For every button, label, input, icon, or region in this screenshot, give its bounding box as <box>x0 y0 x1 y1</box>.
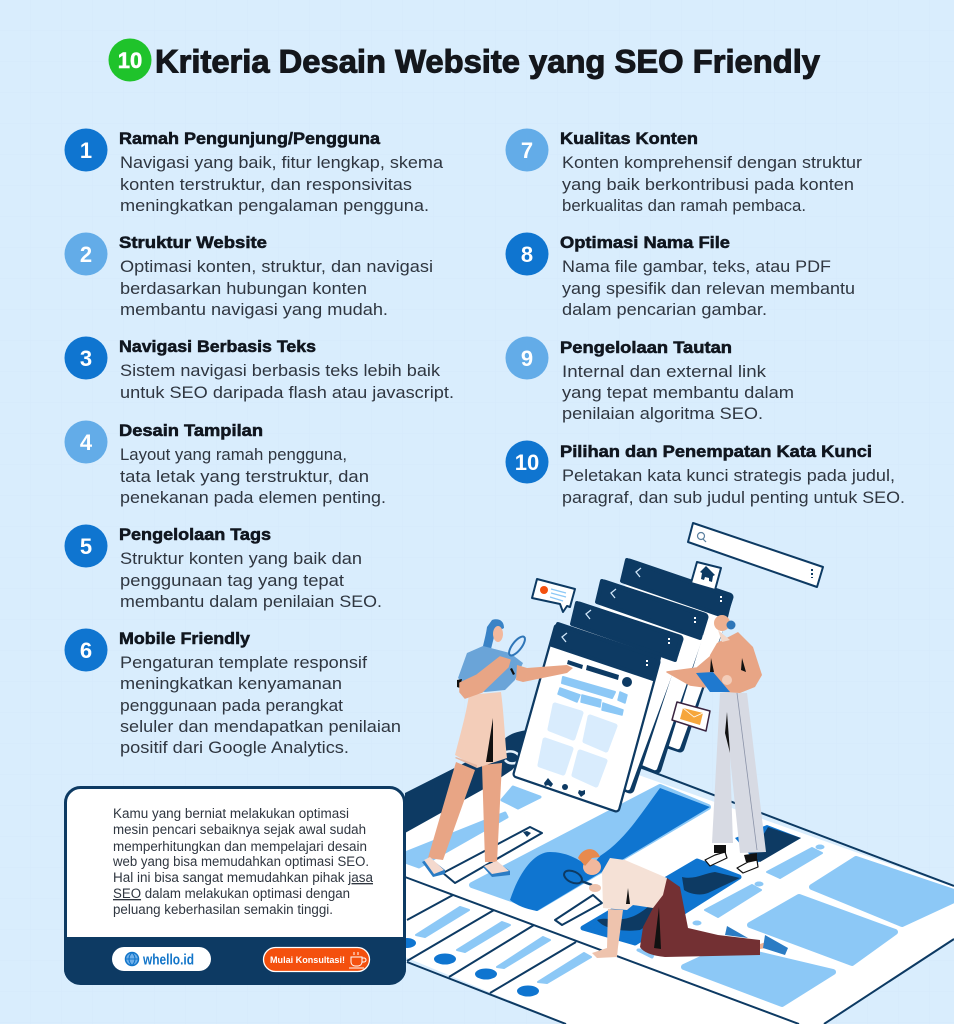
item 10 <box>506 440 905 507</box>
item 10: paragraf, dan sub judul penting untuk SEO. <box>562 488 905 507</box>
item 2: Struktur Website <box>119 233 267 252</box>
website pill: whello.id <box>142 952 194 968</box>
title: 10 <box>118 48 142 73</box>
illustration: back phone 3 <box>622 560 731 748</box>
item 2: membantu navigasi yang mudah. <box>120 300 388 319</box>
item 1 <box>64 128 444 215</box>
item 3: Navigasi Berbasis Teks <box>119 337 316 356</box>
item 4: 4 <box>80 430 93 455</box>
item 2: 2 <box>80 242 92 267</box>
item 10: 10 <box>515 450 539 475</box>
item 6: Pengaturan template responsif <box>120 653 367 672</box>
item 3: Sistem navigasi berbasis teks lebih baik <box>120 361 441 380</box>
item 8: dalam pencarian gambar. <box>562 300 767 319</box>
item 9 <box>506 336 794 423</box>
item 6: Mobile Friendly <box>119 629 251 648</box>
item 2: Optimasi konten, struktur, dan navigasi <box>120 257 433 276</box>
item 7 <box>506 128 862 215</box>
icon: search bar <box>688 523 823 587</box>
item 4: Desain Tampilan <box>119 421 263 440</box>
callout text: memperhitungkan dan mempelajari desain <box>113 839 367 854</box>
item 5: membantu dalam penilaian SEO. <box>120 592 382 611</box>
icon: chat bubble <box>532 579 575 612</box>
illustration: isometric website platform <box>398 730 954 1024</box>
item 7: Konten komprehensif dengan struktur <box>562 153 862 172</box>
item 3 <box>64 336 454 402</box>
item 6 <box>64 628 401 757</box>
item 8: yang spesifik dan relevan membantu <box>562 279 855 298</box>
item 9: penilaian algoritma SEO. <box>562 404 763 423</box>
callout text: mesin pencari sebaiknya sejak awal sudah <box>113 822 366 837</box>
item 1: 1 <box>80 138 92 163</box>
item 1: Ramah Pengunjung/Pengguna <box>119 129 381 148</box>
item 8: Nama file gambar, teks, atau PDF <box>562 257 831 276</box>
website pill <box>112 947 211 971</box>
callout text: web yang bisa memudahkan optimasi SEO. <box>112 854 369 869</box>
item 4: penekanan pada elemen penting. <box>120 488 386 507</box>
item 4 <box>64 420 386 507</box>
item 10: Peletakan kata kunci strategis pada judul, <box>562 466 895 485</box>
item 10: Pilihan dan Penempatan Kata Kunci <box>560 442 872 461</box>
illustration: back phone 2 <box>597 581 706 769</box>
item 6: seluler dan mendapatkan penilaian <box>120 717 401 736</box>
item 4: tata letak yang terstruktur, dan <box>120 467 369 486</box>
title: Kriteria Desain Website yang SEO Friendly <box>155 44 820 80</box>
item 7: Kualitas Konten <box>560 129 698 148</box>
item 9: yang tepat membantu dalam <box>562 383 794 402</box>
item 1: meningkatkan pengalaman pengguna. <box>120 196 429 215</box>
icon: mail <box>672 702 710 731</box>
item 9: Internal dan external link <box>562 362 767 381</box>
callout text: SEO dalam melakukan optimasi dengan <box>113 886 350 901</box>
item 6: penggunaan pada perangkat <box>120 696 343 715</box>
item 7: 7 <box>521 138 533 163</box>
consultation button <box>264 948 370 972</box>
icon: home <box>691 562 721 590</box>
item 9: Pengelolaan Tautan <box>560 338 732 357</box>
item 5: 5 <box>80 534 92 559</box>
item 6: positif dari Google Analytics. <box>120 738 349 757</box>
figure: woman with magnifier <box>422 619 573 877</box>
item 2 <box>64 232 433 319</box>
item 8: 8 <box>521 242 533 267</box>
illustration: main phone <box>517 624 659 808</box>
item 8 <box>506 232 855 319</box>
item 7: berkualitas dan ramah pembaca. <box>562 196 806 215</box>
item 4: Layout yang ramah pengguna, <box>120 445 347 464</box>
item 7: yang baik berkontribusi pada konten <box>562 175 854 194</box>
callout text: Hal ini bisa sangat memudahkan pihak jasa <box>113 870 373 885</box>
item 1: Navigasi yang baik, fitur lengkap, skema <box>120 153 444 172</box>
item 3: 3 <box>80 346 92 371</box>
item 3: untuk SEO daripada flash atau javascript. <box>120 383 454 402</box>
illustration: back phone 1 <box>572 603 681 789</box>
figure: crawling man with magnifier <box>562 849 788 958</box>
item 8: Optimasi Nama File <box>560 233 730 252</box>
item 6: 6 <box>80 638 92 663</box>
item 5: Pengelolaan Tags <box>119 525 271 544</box>
item 5: Struktur konten yang baik dan <box>120 549 362 568</box>
item 6: meningkatkan kenyamanan <box>120 674 342 693</box>
item 2: berdasarkan hubungan konten <box>120 279 367 298</box>
item 1: konten terstruktur, dan responsivitas <box>120 175 412 194</box>
callout panel <box>64 788 406 984</box>
callout text: Kamu yang berniat melakukan optimasi <box>113 806 349 821</box>
figure: standing man <box>667 615 766 873</box>
item 5 <box>64 524 382 611</box>
callout text: peluang keberhasilan semakin tinggi. <box>113 902 333 917</box>
item 5: penggunaan tag yang tepat <box>120 571 344 590</box>
callout text <box>112 806 373 917</box>
consultation button: Mulai Konsultasi! <box>270 955 345 966</box>
item 9: 9 <box>521 346 533 371</box>
